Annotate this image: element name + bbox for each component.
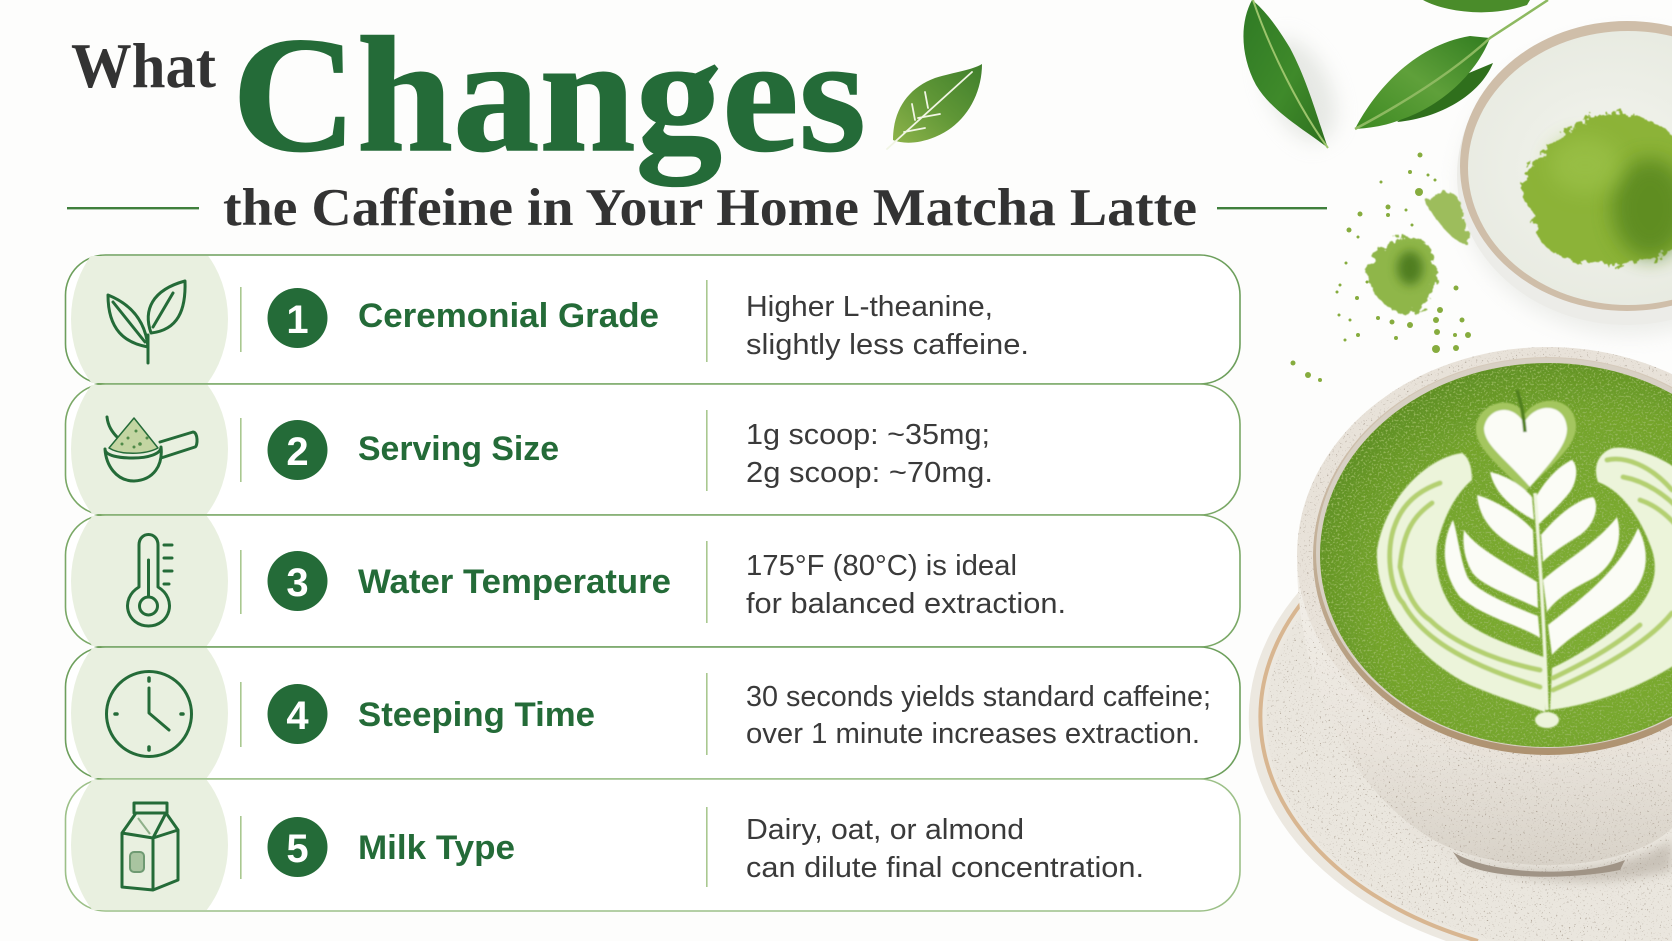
number badge 5 — [268, 817, 328, 877]
number badge 4: 4 — [286, 694, 309, 738]
icon: milk carton — [122, 803, 178, 890]
row description — [746, 291, 1029, 361]
row title: Milk Type — [358, 829, 515, 867]
photo: scattered powder — [1290, 152, 1471, 382]
matcha surface — [1320, 363, 1672, 747]
row description: can dilute final concentration. — [746, 852, 1144, 884]
row description — [746, 550, 1066, 620]
leaf top — [1423, 0, 1530, 12]
row description: for balanced extraction. — [746, 588, 1066, 620]
heart notch — [1517, 390, 1525, 432]
icon: scoop — [105, 417, 197, 481]
row description: 1g scoop: ~35mg; — [746, 419, 990, 451]
cup shadow on saucer — [1400, 820, 1672, 882]
latte art — [1377, 390, 1672, 728]
leaf under — [1397, 63, 1493, 122]
word: Changes: Changes — [232, 3, 866, 187]
row description: Dairy, oat, or almond — [746, 814, 1024, 846]
panel: row 2 serving size — [64, 383, 1241, 515]
number badge 1 — [268, 288, 328, 348]
cup rim — [1297, 347, 1672, 763]
leaf centre with stem — [1355, 0, 1548, 129]
photo: matcha leaves — [1243, 0, 1548, 153]
row description: Higher L-theanine, — [746, 291, 993, 323]
row description — [746, 419, 993, 489]
subtitle text: the Caffeine in Your Home Matcha Latte — [223, 179, 1197, 237]
row title: Ceremonial Grade — [358, 297, 659, 335]
leaf left — [1243, 0, 1328, 148]
row description: 30 seconds yields standard caffeine; — [746, 681, 1211, 713]
row description — [746, 681, 1211, 750]
number badge 4 — [268, 684, 328, 744]
panel: row 3 water temperature — [64, 514, 1241, 647]
row description: 2g scoop: ~70mg. — [746, 457, 993, 489]
number badge 3: 3 — [286, 561, 309, 605]
cup foot — [1453, 852, 1625, 877]
icon: thermometer — [128, 534, 172, 626]
icon: clock — [106, 672, 192, 756]
left swirl lobe — [1377, 453, 1546, 712]
number badge 3 — [268, 551, 328, 611]
row title: Water Temperature — [358, 563, 671, 601]
icon: title leaf — [887, 64, 982, 149]
row description — [746, 814, 1144, 884]
cup body — [1297, 555, 1672, 865]
row title: Serving Size — [358, 430, 559, 468]
photo: saucer — [1249, 468, 1672, 941]
photo: latte cup — [1297, 347, 1672, 882]
row description: over 1 minute increases extraction. — [746, 718, 1200, 750]
number badge 2: 2 — [286, 430, 309, 474]
right swirl lobe — [1550, 448, 1672, 710]
panel: row 1 ceremonial grade — [64, 254, 1241, 384]
photo: powder bowl — [1457, 21, 1672, 335]
number badge 2 — [268, 420, 328, 480]
word: What: What — [71, 30, 217, 101]
number badge 1: 1 — [286, 298, 309, 342]
swirl stripes — [1390, 459, 1672, 690]
panel: row 5 milk type — [64, 778, 1241, 912]
central stem — [1535, 493, 1547, 710]
number badge 5: 5 — [286, 827, 309, 871]
title: What Changes — [71, 3, 866, 187]
feather leaves — [1445, 408, 1646, 655]
heart halo — [1476, 401, 1576, 492]
powder pile — [1522, 112, 1672, 265]
row title: Steeping Time — [358, 696, 595, 734]
row description: 175°F (80°C) is ideal — [746, 550, 1017, 582]
row description: slightly less caffeine. — [746, 329, 1029, 361]
icon: tea sprig — [108, 281, 185, 363]
panel: row 4 steeping time — [64, 646, 1241, 779]
